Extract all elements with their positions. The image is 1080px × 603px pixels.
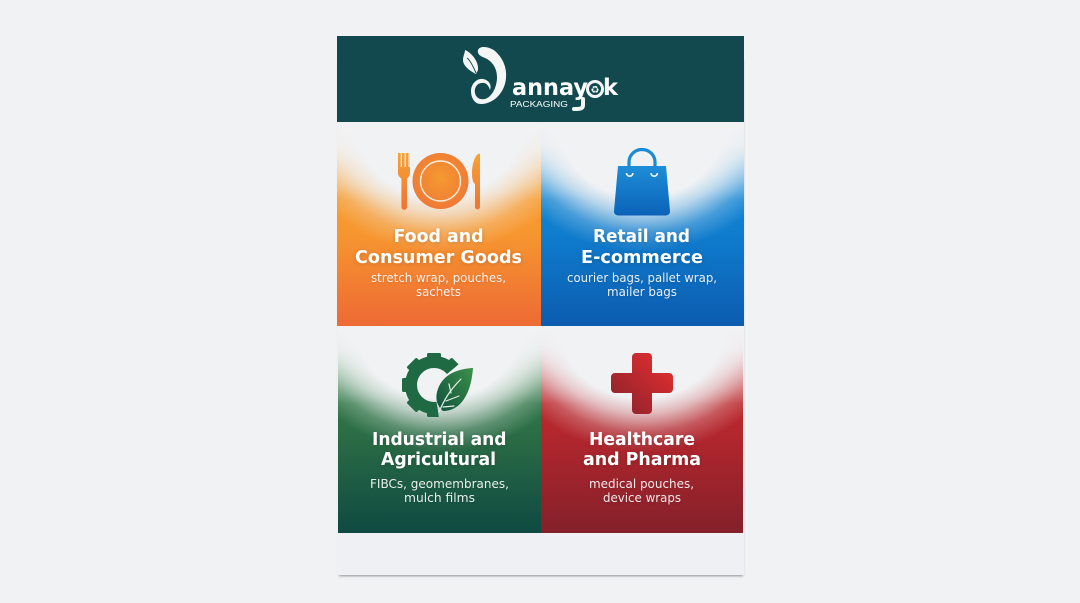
- heading: healthcare and pharma: [583, 429, 701, 470]
- heading: food and consumer goods: Food and: [394, 226, 484, 247]
- poster sheet: [337, 36, 744, 576]
- heading: retail and e-commerce: [581, 226, 703, 268]
- text: industrial examples: [370, 477, 509, 505]
- heading: retail and e-commerce: E-commerce: [581, 247, 703, 268]
- text: industrial examples: FIBCs, geomembranes,: [370, 477, 509, 491]
- text: healthcare examples: medical pouches,: [589, 477, 694, 491]
- icon: medical cross: [611, 353, 673, 414]
- header band with logo: [337, 36, 744, 122]
- text: food examples: [371, 271, 506, 299]
- text: retail examples: mailer bags: [607, 285, 677, 299]
- heading: healthcare and pharma: and Pharma: [583, 449, 701, 470]
- logo: wordmark: k: [603, 75, 619, 101]
- text: food examples: stretch wrap, pouches,: [371, 271, 506, 285]
- logo: wordmark: [510, 75, 619, 109]
- text: healthcare examples: [589, 477, 694, 505]
- icon: shopping bag: [614, 150, 670, 216]
- text: retail examples: [567, 271, 717, 299]
- heading: industrial and agricultural: [372, 429, 506, 470]
- icon: plate and cutlery: [398, 153, 480, 210]
- text: healthcare examples: device wraps: [603, 491, 681, 505]
- text: industrial examples: mulch films: [404, 491, 475, 505]
- logo: wordmark: annay: [512, 75, 588, 101]
- logo: elephant trunk mark: [471, 47, 506, 104]
- heading: food and consumer goods: [355, 226, 522, 268]
- heading: retail and e-commerce: Retail and: [593, 226, 690, 247]
- heading: industrial and agricultural: Agricultural: [381, 449, 496, 470]
- text: retail examples: courier bags, pallet wrap,: [567, 271, 717, 285]
- heading: healthcare and pharma: Healthcare: [589, 429, 695, 450]
- heading: food and consumer goods: Consumer Goods: [355, 247, 522, 268]
- icon: gear and leaf: [402, 353, 473, 417]
- logo: leaf: [463, 50, 478, 74]
- logo: wordmark: PACKAGING: [510, 100, 568, 109]
- logo: wordmark: ♻: [591, 85, 600, 96]
- text: food examples: sachets: [416, 285, 461, 299]
- heading: industrial and agricultural: Industrial and: [372, 429, 506, 450]
- panel: healthcare and pharma: [541, 351, 743, 533]
- panel: food and consumer goods: [337, 146, 541, 326]
- panel: industrial and agricultural: [338, 352, 541, 533]
- panel: retail and e-commerce: [541, 147, 744, 326]
